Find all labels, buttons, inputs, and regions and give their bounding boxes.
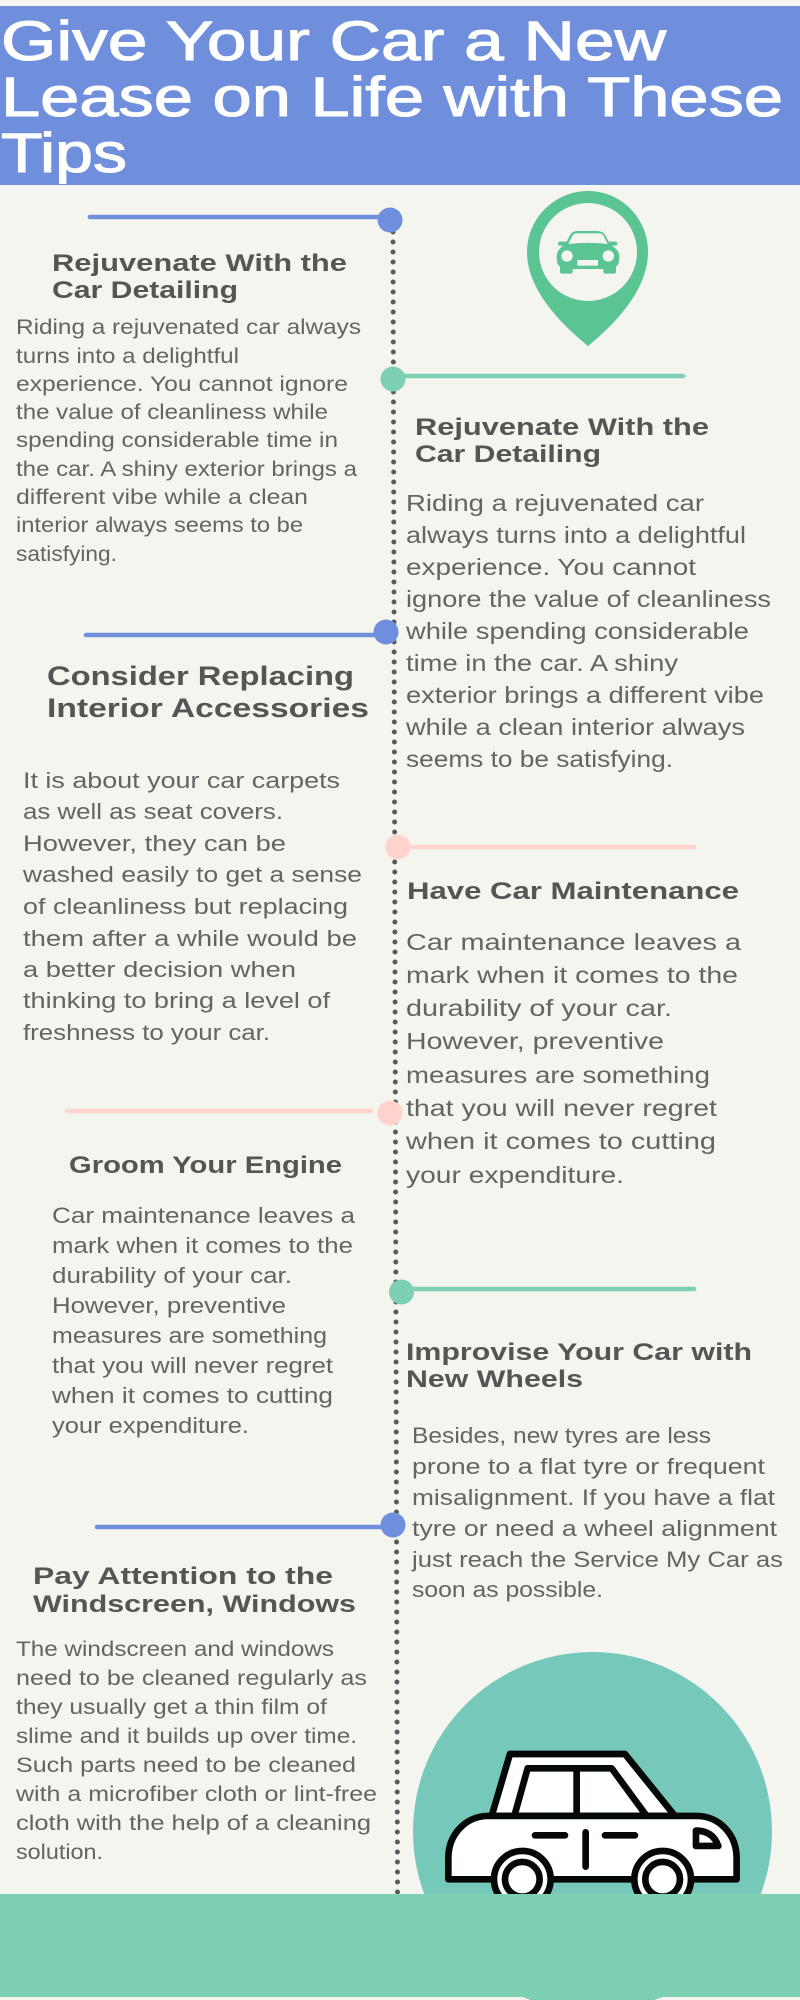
tip 1 right: heading: Car Detailing [415,441,601,468]
tip 2 left: heading: Consider Replacing [47,661,354,691]
tip 4 right: body text: tyre or need a wheel alignment [412,1516,777,1541]
tip 1 right: body text: experience. You cannot [406,554,697,580]
tip 1 left: heading [52,250,347,304]
tip 2 left: body text: However, they can be [23,831,286,856]
tip 4 right: heading: Improvise Your Car with [406,1339,752,1366]
tip 4 right: body text: soon as possible. [412,1577,603,1602]
tip 2 left: body text: washed easily to get a sense [22,862,362,887]
tip 3 right: body text: your expenditure. [406,1162,624,1188]
tip 5 left: body text: cloth with the help of a cleaning [16,1812,371,1835]
tip 2 left: body text: thinking to bring a level of [23,988,331,1013]
tip 3 left: body text: measures are something [52,1323,327,1348]
tip 3 right: body text [405,929,741,1188]
tip 5 left: body text: with a microfiber cloth or lint-free [15,1783,377,1806]
tip 1 left: body text [16,316,361,566]
tip 1 right: body text: while a clean interior always [405,714,745,740]
tip 3 left: heading: Groom Your Engine [69,1152,342,1179]
tip 4 right: heading [406,1339,752,1393]
tip 5 left: body text: solution. [16,1841,103,1864]
title banner [0,6,800,185]
tip 3 right: body text: that you will never regret [406,1095,718,1121]
tip 1 right: body text: seems to be satisfying. [406,746,673,772]
tip 1 left: body text: the value of cleanliness while [16,401,328,424]
tip 1 left: marker [90,208,402,232]
tip 1 left: body text: spending considerable time in [16,429,338,452]
tip 1 right: marker [380,366,683,392]
tip 5 left: body text: Such parts need to be cleaned [16,1754,356,1777]
tip 1 left: body text: turns into a delightful [16,345,239,368]
icon: side-view car [448,1754,737,1908]
tip 1 right: body text [405,490,771,772]
tip 4 right: marker [389,1280,694,1304]
tip 2 left: body text: as well as seat covers. [23,799,283,824]
tip 5 left: marker [97,1512,406,1538]
tip 3 left: body text: Car maintenance leaves a [52,1203,356,1228]
tip 1 left: body text: different vibe while a clean [16,486,308,509]
tip 2 left: heading [47,661,369,723]
tip 1 right: body text: always turns into a delightful [406,522,746,548]
tip 3 right: body text: Car maintenance leaves a [406,929,741,955]
tip 1 left: heading: Car Detailing [52,277,238,304]
tip 3 left: body text: when it comes to cutting [51,1383,333,1408]
tip 5 left: body text: need to be cleaned regularly as [16,1667,367,1690]
tip 4 right: body text: prone to a flat tyre or frequent [412,1454,765,1479]
tip 1 left: body text: Riding a rejuvenated car always [16,316,361,339]
tip 2 left: body text [22,768,362,1045]
tip 3 right: body text: measures are something [406,1062,710,1088]
tip 5 left: body text: slime and it builds up over time. [16,1725,357,1748]
tip 3 right: body text: mark when it comes to the [406,962,738,988]
tip 2 left: marker [86,620,398,644]
tip 1 right: body text: Riding a rejuvenated car [406,490,704,516]
tip 3 left: body text: mark when it comes to the [52,1233,353,1258]
tip 4 right: body text: Besides, new tyres are less [412,1423,711,1448]
tip 1 left: body text: experience. You cannot ignore [16,373,348,396]
tip 3 right: heading: Have Car Maintenance [407,878,739,905]
tip 1 right: body text: time in the car. A shiny [406,650,679,676]
tip 3 left: body text: that you will never regret [52,1353,333,1378]
footer band [0,1894,800,2000]
tip 1 right: body text: ignore the value of cleanliness [406,586,771,612]
tip 4 right: body text: just reach the Service My Car as [411,1547,783,1572]
tip 3 right: body text: durability of your car. [406,995,672,1021]
tip 3 left: body text: your expenditure. [52,1413,249,1438]
tip 2 left: body text: them after a while would be [23,926,357,951]
tip 5 left: heading: Pay Attention to the [33,1563,333,1590]
tip 2 left: body text: a better decision when [23,957,296,982]
tip 1 left: body text: interior always seems to be [16,514,303,537]
tip 1 left: body text: satisfying. [16,543,117,566]
tip 3 left: body text: durability of your car. [52,1263,292,1288]
tip 5 left: body text [15,1638,377,1864]
tip 4 right: body text [411,1423,783,1602]
tip 2 left: body text: freshness to your car. [23,1020,270,1045]
tip 3 left: body text: However, preventive [52,1293,286,1318]
tip 1 right: body text: exterior brings a different vibe [406,682,764,708]
tip 2 left: body text: It is about your car carpets [23,768,340,793]
tip 3 right: body text: However, preventive [406,1028,664,1054]
dotted timeline [393,232,398,1892]
tip 3 right: marker [386,834,694,860]
tip 5 left: heading: Windscreen, Windows [33,1591,356,1618]
tip 1 right: heading: Rejuvenate With the [415,414,709,441]
tip 4 right: heading: New Wheels [406,1366,583,1393]
tip 5 left: body text: they usually get a thin film of [16,1696,327,1719]
tip 2 left: body text: of cleanliness but replacing [23,894,348,919]
icon: location pin with car [527,191,648,346]
tip 1 right: heading [415,414,709,468]
tip 3 left: body text [51,1203,356,1438]
tip 3 left: marker [67,1100,402,1126]
tip 4 right: body text: misalignment. If you have a flat [412,1485,775,1510]
tip 5 left: body text: The windscreen and windows [16,1638,334,1661]
tip 1 left: heading: Rejuvenate With the [52,250,347,277]
teal circle behind car [413,1652,772,2000]
tip 1 left: body text: the car. A shiny exterior brings a [16,458,357,481]
title banner: Lease on Life with These [1,65,783,128]
tip 5 left: heading [33,1563,356,1618]
tip 1 right: body text: while spending considerable [405,618,749,644]
tip 2 left: heading: Interior Accessories [47,693,369,723]
title banner: Tips [1,121,127,184]
title banner: Give Your Car a New [1,9,667,72]
tip 3 right: body text: when it comes to cutting [405,1128,716,1154]
